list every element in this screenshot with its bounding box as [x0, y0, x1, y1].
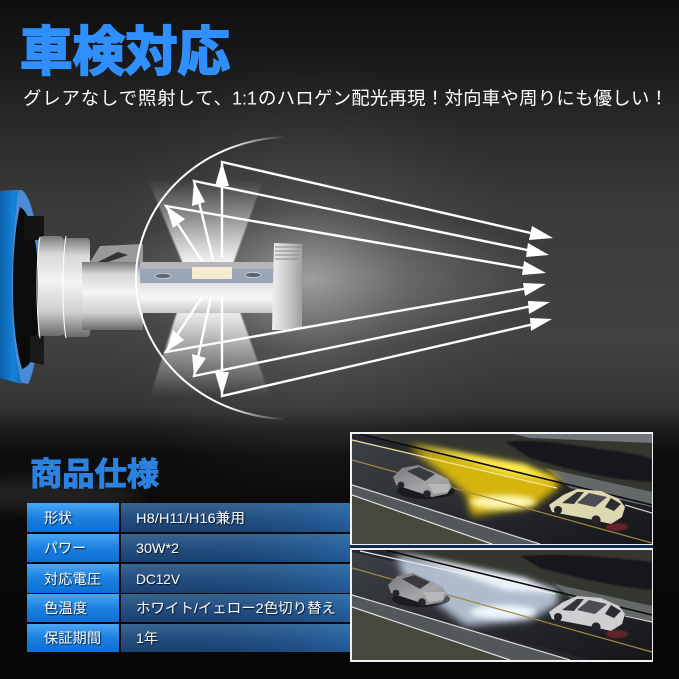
row: power: パワー [44, 540, 86, 556]
heat sink [272, 243, 302, 330]
row: voltage: DC12V [136, 571, 181, 587]
upper rays [166, 162, 535, 269]
spec table [27, 503, 350, 652]
row: warranty [27, 624, 350, 652]
LED tube [140, 262, 274, 313]
reflector arc [136, 137, 444, 419]
subtitle: 1:1 [232, 88, 257, 108]
yellow beam [408, 446, 558, 516]
silver base cylinders [37, 236, 143, 338]
row: warranty: 保証期間 [44, 630, 101, 646]
photo: white beam on road [350, 548, 653, 662]
subtitle: のハロゲン配光再現！対向車や周りにも優しい！ [258, 88, 668, 108]
reflected light arrows [166, 162, 553, 396]
title: 車検対応 [20, 23, 230, 82]
row: power [27, 534, 350, 562]
LED chip [192, 267, 232, 279]
row: color temperature [27, 594, 350, 622]
blue socket ring [0, 190, 44, 384]
strip between photos [350, 545, 653, 548]
row: shape: H8/H11/H16兼用 [136, 510, 245, 526]
arrowheads on the reflector [166, 162, 229, 396]
lower light cone [150, 312, 270, 396]
row: voltage [27, 564, 350, 593]
row: shape: 形状 [44, 510, 72, 526]
row: power: 30W*2 [136, 540, 179, 556]
subtitle: グレアなしで照射して、 [23, 88, 232, 108]
heading: product specs: 商品仕様 [30, 456, 159, 492]
row: shape [27, 503, 350, 532]
row: color temperature: 色温度 [44, 600, 87, 616]
white beam [395, 554, 558, 626]
upper light cone [148, 180, 263, 264]
row: voltage: 対応電圧 [44, 571, 101, 587]
row: warranty: 1年 [136, 630, 158, 646]
subtitle [23, 88, 668, 108]
row: color temperature: ホワイト/イェロー2色切り替え [136, 600, 336, 616]
lower rays [166, 288, 534, 396]
arrowheads at the right [522, 226, 553, 331]
LED bulb illustration [0, 190, 302, 384]
photo: yellow beam on road [350, 432, 653, 545]
